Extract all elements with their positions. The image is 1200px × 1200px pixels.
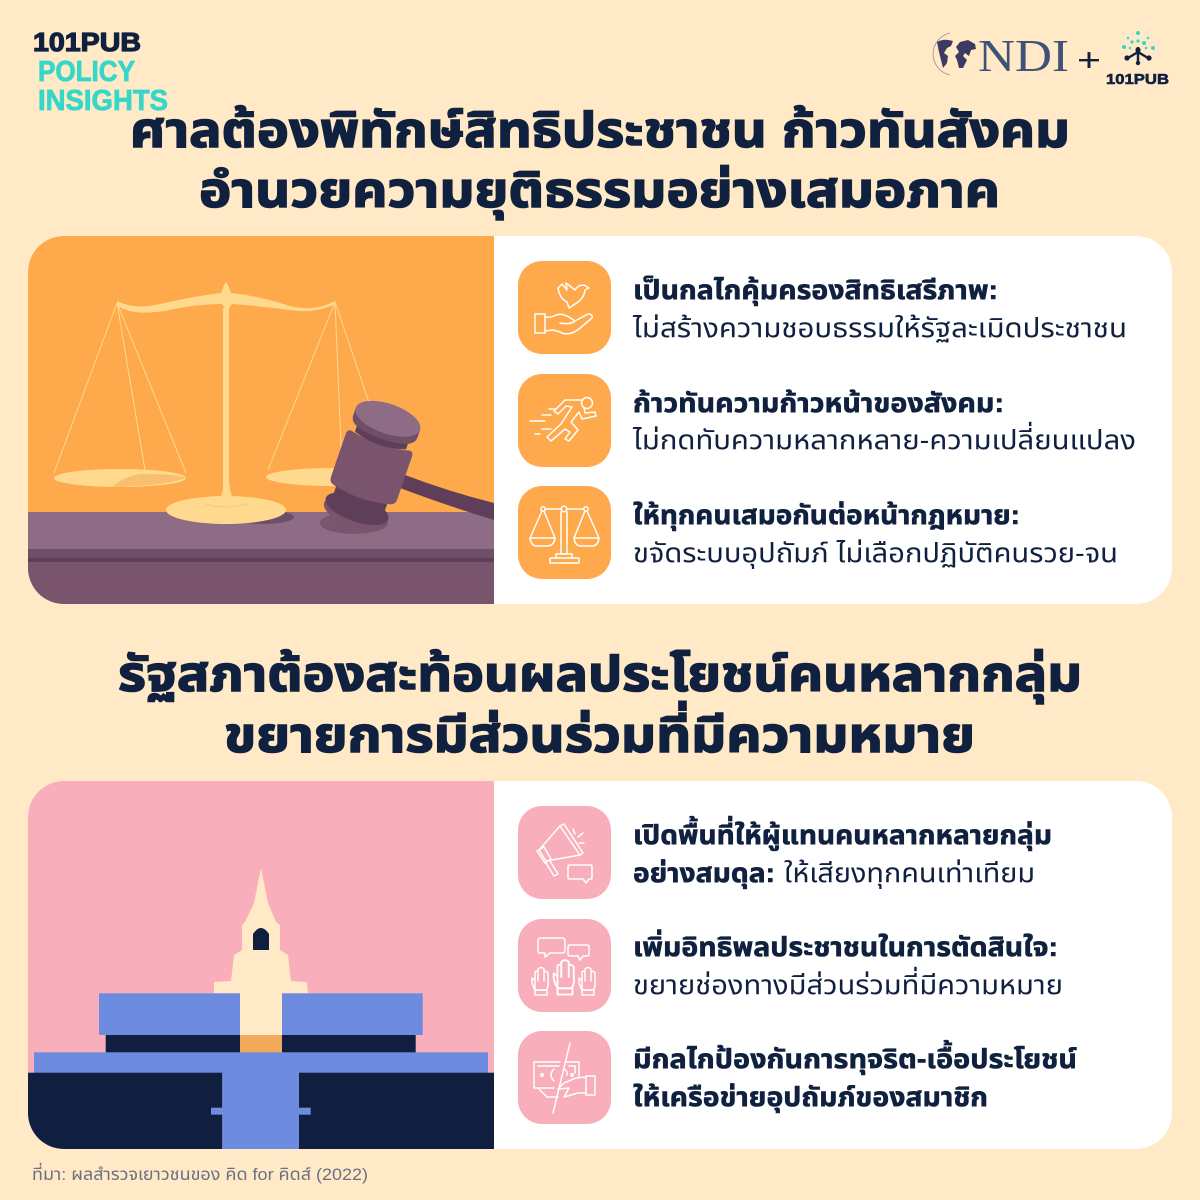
text: open space for representatives: เปิดพื้นที่ให้ผู้แทนคนหลากหลายกลุ่ม <box>633 816 1052 851</box>
text: increase public influence <box>633 930 1063 1000</box>
heading: courts <box>130 104 1070 220</box>
panel: parliament <box>28 781 1172 1150</box>
logo: 101PUB Policy Insights: 101PUB <box>33 27 141 57</box>
text: keep up with society <box>632 388 1136 455</box>
text: open space for representatives: ให้เสียงทุกคนเท่าเทียม <box>784 858 1035 889</box>
icon: balance scale <box>518 486 611 579</box>
text: keep up with society: ไม่กดทับความหลากหลาย-ความเปลี่ยนแปลง <box>632 421 1136 455</box>
text: anti corruption <box>633 1040 1077 1113</box>
text: equality before law: ขจัดระบบอุปถัมภ์ ไม่เลือกปฏิบัติคนรวย-จน <box>633 538 1118 569</box>
text: equality before law <box>633 500 1118 569</box>
text: anti corruption: ให้เครือข่ายอุปถัมภ์ของสมาชิก <box>633 1082 988 1113</box>
text: protect rights: ไม่สร้างความชอบธรรมให้รัฐละเมิดประชาชน <box>632 313 1127 343</box>
icon: NDI globe <box>933 33 976 75</box>
heading: courts: อำนวยความยุติธรรมอย่างเสมอภาค <box>199 164 1000 220</box>
logo: NDI + 101PUB <box>933 30 1169 88</box>
heading: parliament: รัฐสภาต้องสะท้อนผลประโยชน์คนหลากกลุ่ม <box>118 648 1082 704</box>
logo: 101PUB Policy Insights: POLICY <box>38 56 135 88</box>
text: keep up with society: ก้าวทันความก้าวหน้าของสังคม: <box>633 388 1004 418</box>
logo: NDI + 101PUB: + <box>1077 42 1101 78</box>
text: increase public influence: ขยายช่องทางมีส่วนร่วมที่มีความหมาย <box>633 966 1063 1000</box>
source note: ที่มา: ผลสำรวจเยาวชนของ คิด for คิดส์ (2022) <box>32 1162 368 1184</box>
icon: money and hand <box>518 1031 611 1124</box>
logo: 101PUB Policy Insights <box>33 27 168 117</box>
icon: running person <box>518 374 611 467</box>
heading: parliament <box>118 648 1082 763</box>
text: open space for representatives <box>633 816 1052 889</box>
icon: 101PUB network <box>1122 31 1155 65</box>
logo: NDI + 101PUB: NDI <box>978 30 1069 81</box>
text: protect rights: เป็นกลไกคุ้มครองสิทธิเสรีภาพ: <box>633 275 998 306</box>
icon: megaphone <box>518 806 611 899</box>
heading: courts: ศาลต้องพิทักษ์สิทธิประชาชน ก้าวทันสังคม <box>130 104 1070 158</box>
logo: 101PUB Policy Insights: INSIGHTS <box>38 85 168 117</box>
text: anti corruption: มีกลไกป้องกันการทุจริต-เอื้อประโยชน์ <box>633 1040 1077 1075</box>
text: equality before law: ให้ทุกคนเสมอกันต่อหน้ากฎหมาย: <box>633 500 1020 531</box>
illustration: parliament building <box>28 781 494 1150</box>
icon: hand and dove <box>518 261 611 354</box>
text: increase public influence: เพิ่มอิทธิพลประชาชนในการตัดสินใจ: <box>633 930 1058 962</box>
heading: parliament: ขยายการมีส่วนร่วมที่มีความหมาย <box>224 701 975 763</box>
logo: NDI + 101PUB: 101PUB <box>1106 71 1169 88</box>
text: protect rights <box>632 275 1127 343</box>
illustration: scales and gavel <box>28 236 494 604</box>
text: open space for representatives: อย่างสมดุล: <box>633 858 775 889</box>
panel: courts <box>28 236 1172 604</box>
icon: raised hands <box>518 919 611 1012</box>
